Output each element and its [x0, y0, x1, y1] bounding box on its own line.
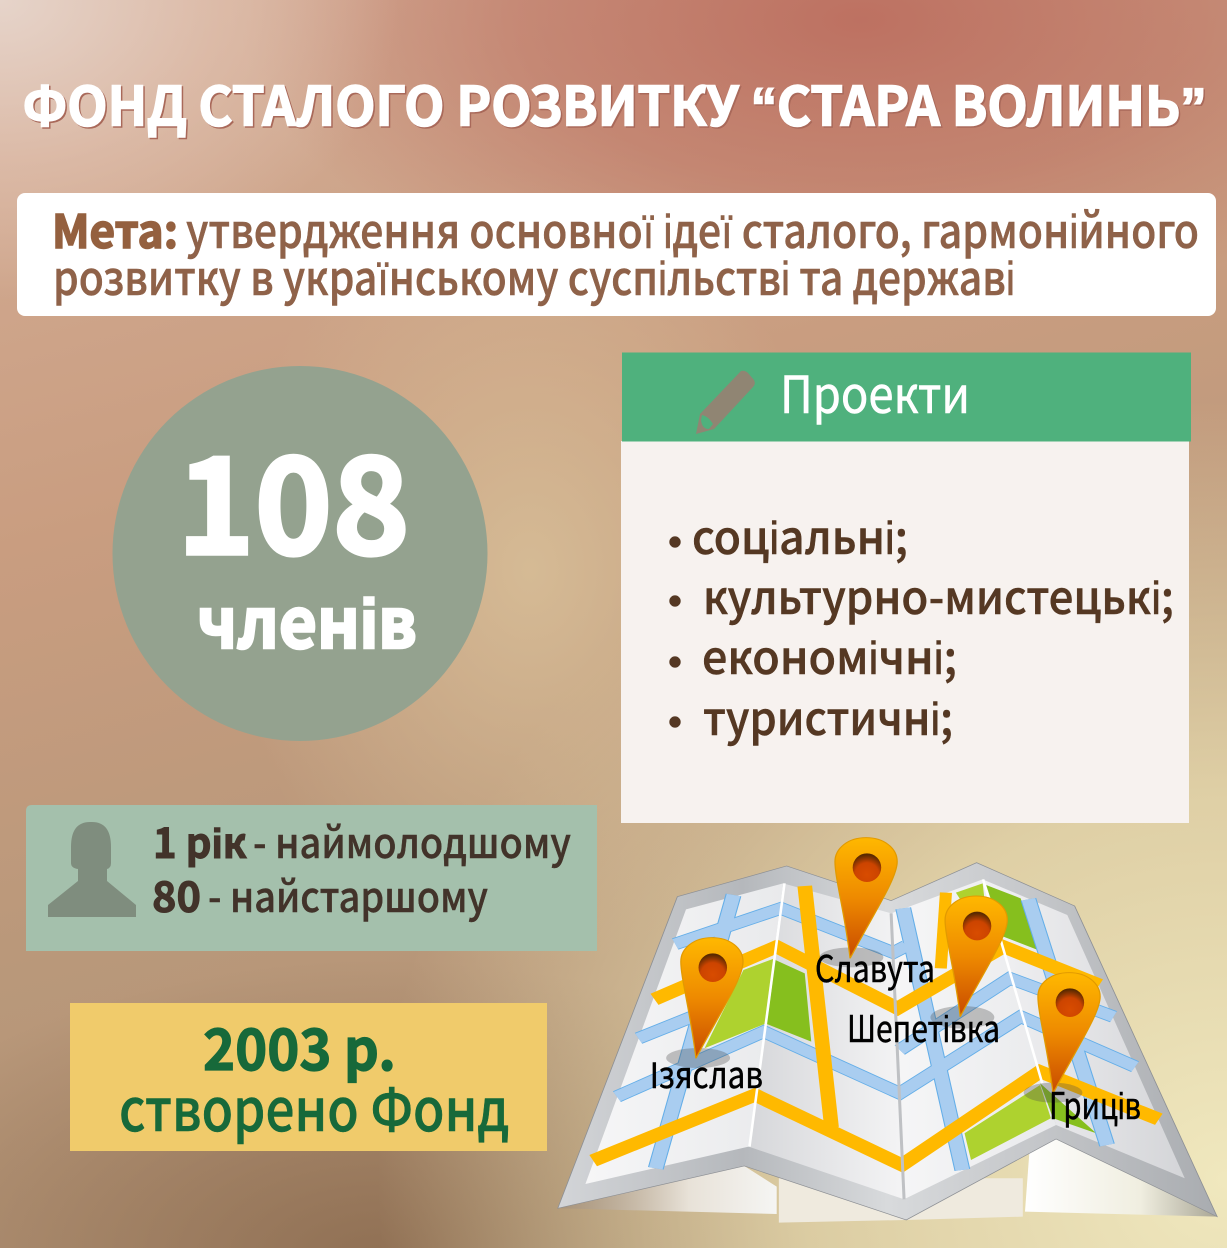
blue roads: [617, 895, 1135, 1170]
projects header: [622, 352, 1191, 442]
goal label: Мета:: [52, 196, 178, 262]
age text: - наймолодшому: [253, 810, 571, 871]
panel: projects: [621, 352, 1191, 823]
number of members: 108: [177, 399, 410, 593]
pin: Гриців: [1038, 973, 1100, 1093]
age text: [152, 810, 571, 925]
goal text: розвитку в українському суспільстві та державі: [53, 240, 1015, 309]
map frame: [558, 863, 1217, 1220]
green areas: [705, 883, 1096, 1160]
map labels: Гриців: [1049, 1076, 1141, 1130]
age text: 80: [152, 864, 201, 925]
projects list: культурно-мистецькі;: [703, 562, 1174, 628]
circle: members count: [112, 366, 488, 741]
map labels: Славута: [815, 939, 935, 993]
icon: person: [48, 822, 136, 917]
goal text: [53, 193, 1199, 309]
pin: Шепетівка: [945, 896, 1007, 1017]
map labels: Ізяслав: [650, 1045, 763, 1099]
age text: - найстаршому: [208, 864, 488, 925]
pin: Ізяслав: [681, 938, 743, 1058]
fold lines: [749, 879, 1042, 1199]
panel: founding year: [70, 1003, 547, 1151]
panel: goal: [17, 193, 1216, 316]
projects list: туристичні;: [703, 683, 953, 749]
pin: Славута: [835, 838, 897, 958]
age text: 1 рік: [153, 810, 247, 871]
map back pages: [558, 1139, 1217, 1223]
founding caption: створено Фонд: [119, 1063, 509, 1148]
map illustration: [558, 838, 1217, 1223]
projects list: соціальні;: [692, 502, 908, 568]
members label: членів: [197, 568, 417, 669]
icon: pencil: [696, 371, 755, 434]
pin shadows: [666, 947, 1082, 1103]
year: 2003 р.: [203, 1005, 396, 1087]
map labels: Шепетівка: [847, 999, 1000, 1053]
projects heading: Проекти: [780, 354, 970, 428]
yellow roads: [593, 886, 1159, 1165]
projects list: економічні;: [702, 622, 957, 688]
title: ФОНД СТАЛОГО РОЗВИТКУ “СТАРА ВОЛИНЬ”: [22, 62, 1206, 142]
panel: age: [26, 805, 597, 951]
title: ФОНД СТАЛОГО РОЗВИТКУ “СТАРА ВОЛИНЬ”: [24, 64, 1208, 143]
projects list: [670, 502, 1174, 749]
map labels: [650, 939, 1141, 1130]
map pages: [585, 879, 1185, 1199]
